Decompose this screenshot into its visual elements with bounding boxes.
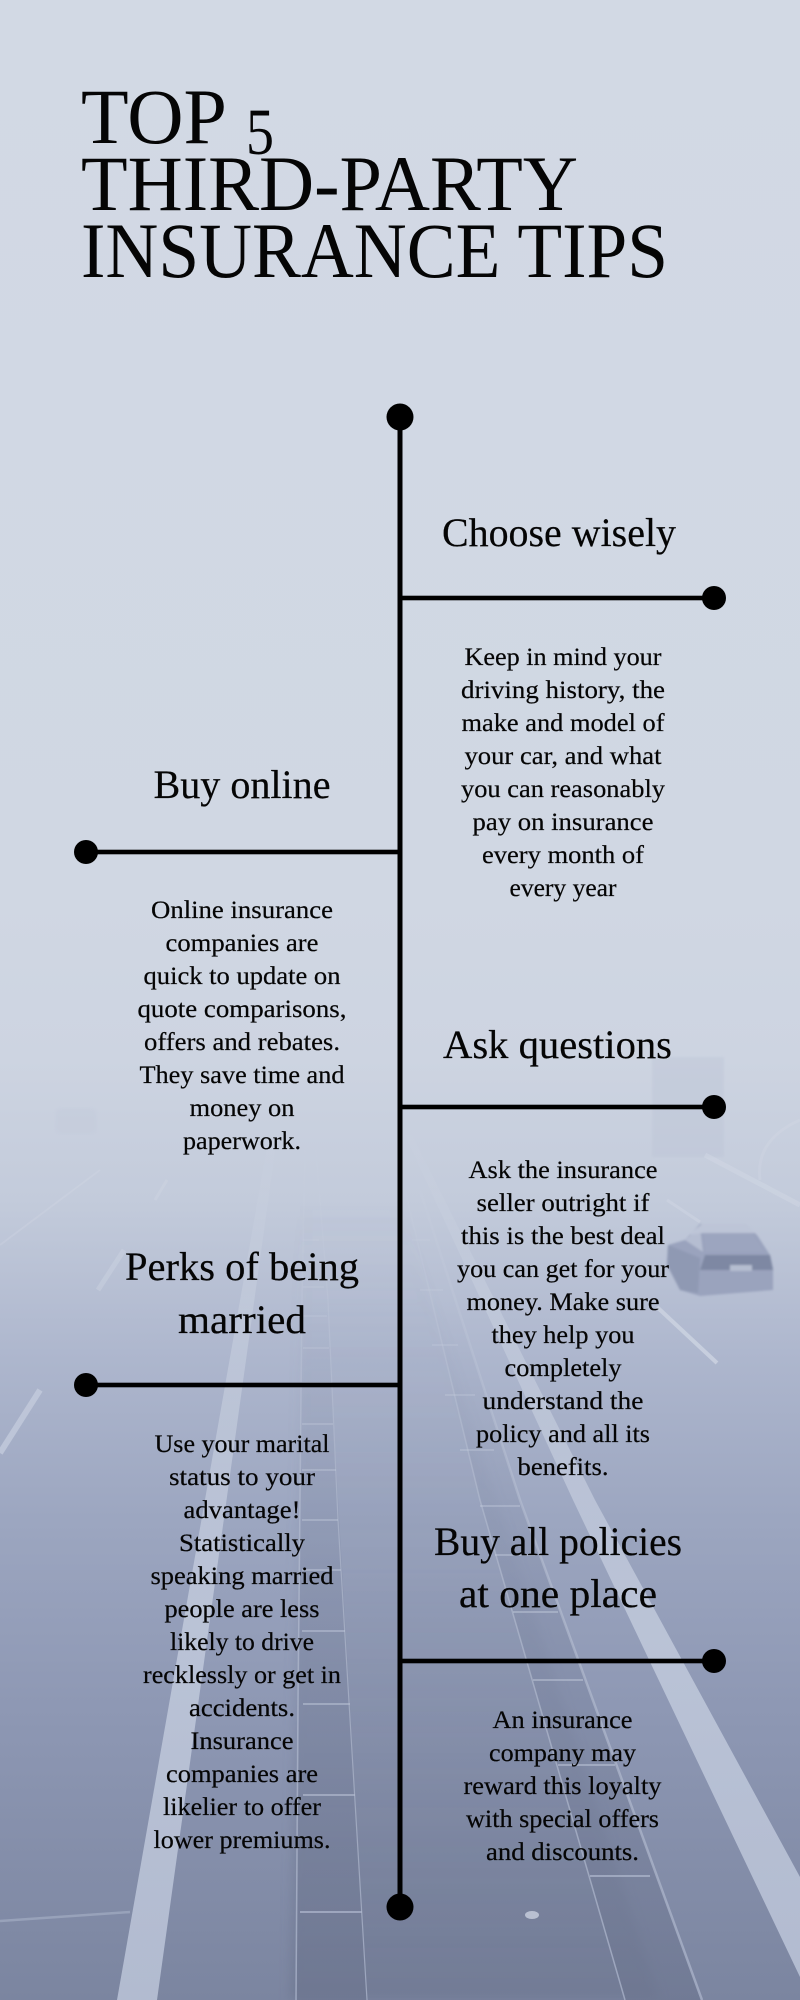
- text: ask questions: seller outright if: [476, 1188, 650, 1217]
- text: buy online: Online insurance: [151, 895, 333, 924]
- timeline spine with end dots: [386, 404, 414, 1920]
- distant truck: [652, 1057, 724, 1157]
- title: INSURANCE TIPS: [81, 207, 668, 294]
- heading: perks of being married: married: [178, 1297, 306, 1342]
- text: buy online: They save time and: [140, 1060, 345, 1089]
- text: choose wisely: every year: [510, 873, 617, 902]
- text: perks of being married: accidents.: [189, 1693, 295, 1722]
- text: buy online: offers and rebates.: [144, 1027, 340, 1056]
- text: choose wisely: pay on insurance: [472, 807, 654, 836]
- lane dashes: [0, 1120, 800, 1921]
- heading: buy all policies at one place: [434, 1519, 682, 1616]
- text: ask questions: you can get for your: [457, 1254, 670, 1283]
- text: buy online: quote comparisons,: [138, 994, 346, 1023]
- text: choose wisely: [461, 642, 665, 902]
- heading: ask questions: Ask questions: [443, 1022, 672, 1067]
- panel: choose wisely: [400, 510, 726, 902]
- connector: choose wisely: [400, 586, 726, 610]
- text: perks of being married: speaking married: [150, 1561, 334, 1590]
- title: THIRD-PARTY: [81, 140, 578, 227]
- text: choose wisely: driving history, the: [461, 675, 665, 704]
- connector: buy online: [74, 840, 400, 864]
- text: choose wisely: Keep in mind your: [464, 642, 662, 671]
- title: 5: [246, 96, 274, 169]
- heading: perks of being married: [125, 1244, 359, 1342]
- text: perks of being married: likelier to offer: [163, 1792, 322, 1821]
- text: buy online: paperwork.: [183, 1126, 301, 1155]
- text: choose wisely: every month of: [482, 840, 645, 869]
- text: perks of being married: Statistically: [179, 1528, 305, 1557]
- text: choose wisely: you can reasonably: [461, 774, 665, 803]
- text: perks of being married: people are less: [164, 1594, 320, 1623]
- heading: choose wisely: Choose wisely: [442, 510, 676, 555]
- text: perks of being married: lower premiums.: [154, 1825, 330, 1854]
- heading: perks of being married: Perks of being: [125, 1244, 359, 1289]
- text: buy online: money on: [190, 1093, 295, 1122]
- text: buy all policies: with special offers: [466, 1804, 659, 1833]
- centre guardrail: [296, 1150, 367, 2000]
- text: buy all policies: company may: [489, 1738, 636, 1767]
- text: ask questions: this is the best deal: [461, 1221, 665, 1250]
- text: ask questions: benefits.: [518, 1452, 608, 1481]
- title: [81, 73, 668, 294]
- left solid road line: [117, 1130, 278, 2000]
- text: perks of being married: [143, 1429, 341, 1854]
- text: ask questions: completely: [504, 1353, 622, 1382]
- connector: perks of being married: [74, 1373, 400, 1397]
- text: buy online: companies are: [166, 928, 318, 957]
- text: ask questions: money. Make sure: [466, 1287, 660, 1316]
- text: ask questions: understand the: [482, 1386, 644, 1415]
- right solid road line: [405, 1135, 800, 1977]
- text: ask questions: [457, 1155, 670, 1481]
- panel: buy all policies at one place: [400, 1519, 726, 1866]
- panel: perks of being married: [74, 1244, 400, 1854]
- distant car left: [55, 1108, 97, 1134]
- text: perks of being married: advantage!: [184, 1495, 300, 1524]
- text: perks of being married: Insurance: [190, 1726, 294, 1755]
- text: perks of being married: companies are: [166, 1759, 318, 1788]
- connector: ask questions: [400, 1095, 726, 1119]
- text: perks of being married: recklessly or get in: [143, 1660, 341, 1689]
- text: perks of being married: Use your marital: [154, 1429, 330, 1458]
- text: ask questions: they help you: [492, 1320, 635, 1349]
- text: ask questions: Ask the insurance: [468, 1155, 658, 1184]
- grass verge between carriageways: [290, 1200, 660, 2000]
- text: buy all policies: An insurance: [492, 1705, 632, 1734]
- text: buy online: [138, 895, 346, 1155]
- panel: ask questions: [400, 1022, 726, 1481]
- text: ask questions: policy and all its: [476, 1419, 650, 1448]
- roadside litter: [525, 1911, 539, 1919]
- connector: buy all policies: [400, 1649, 726, 1673]
- text: buy all policies: reward this loyalty: [464, 1771, 662, 1800]
- text: perks of being married: likely to drive: [170, 1627, 314, 1656]
- right guardrail: [405, 1190, 702, 2000]
- text: perks of being married: status to your: [169, 1462, 316, 1491]
- text: buy all policies: and discounts.: [486, 1837, 639, 1866]
- text: choose wisely: make and model of: [462, 708, 665, 737]
- car in fog: [667, 1224, 773, 1296]
- heading: buy all policies at one place: at one place: [459, 1571, 657, 1616]
- heading: buy online: Buy online: [154, 762, 330, 807]
- text: buy all policies: [464, 1705, 662, 1866]
- text: choose wisely: your car, and what: [464, 741, 662, 770]
- panel: buy online: [74, 762, 400, 1155]
- title: TOP: [81, 73, 225, 160]
- text: buy online: quick to update on: [144, 961, 341, 990]
- heading: buy all policies at one place: Buy all policies: [434, 1519, 682, 1564]
